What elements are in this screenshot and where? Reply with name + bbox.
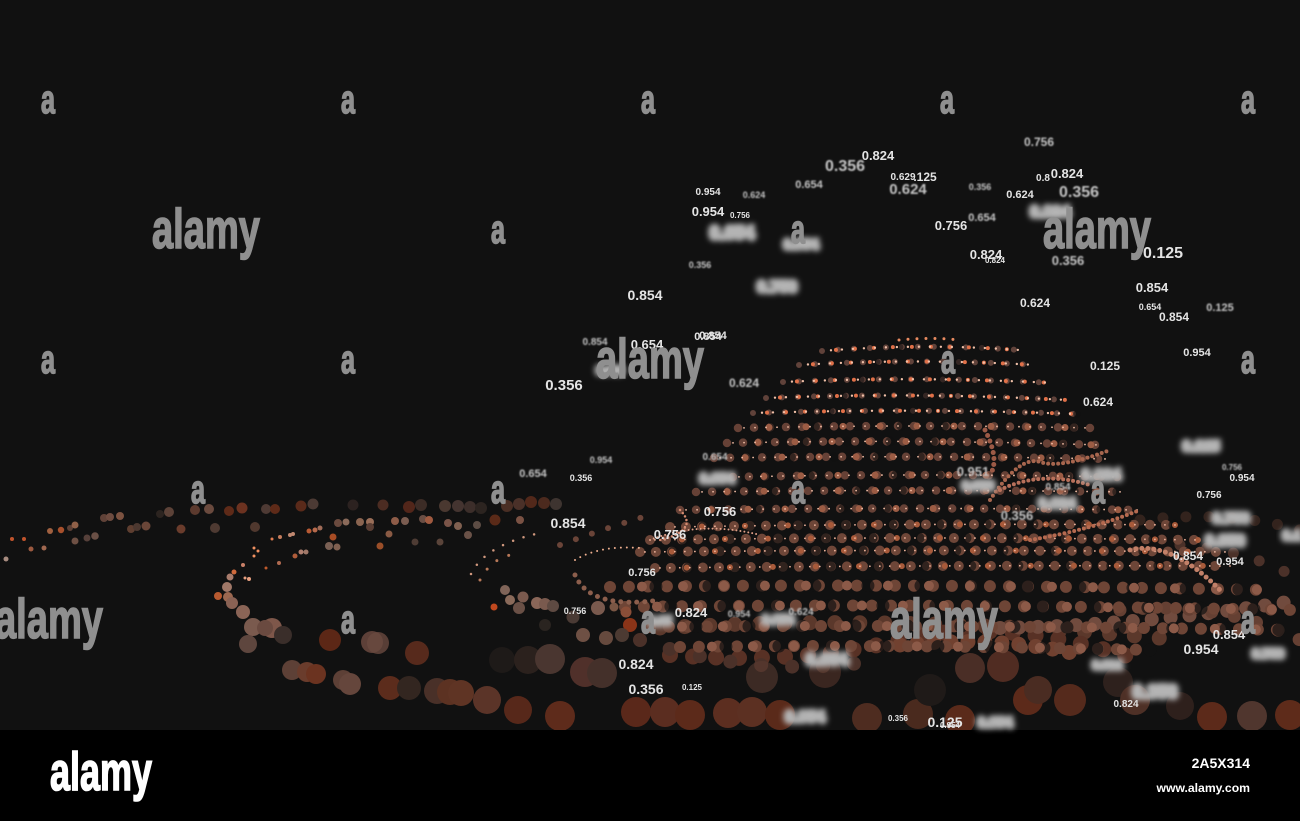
number labels: sharp: 0.824 [675,605,708,620]
number labels: soft focus: 0.756 [1222,463,1243,472]
watermark: alamy wordmarks: alamy [1043,197,1151,260]
number labels: sharp: 0.125 [682,683,703,692]
number labels: sharp: 0.624 [1083,395,1113,409]
number labels: defocused blobs [596,204,1300,730]
number labels: soft focus: 0.356 [1059,184,1099,201]
watermark: small a marks: a [41,338,55,382]
number labels: soft focus: 0.854 [582,337,608,348]
number labels: sharp: 0.954 [1183,347,1212,359]
number labels: soft focus: 0.624 [743,190,765,200]
number labels: soft focus [519,135,1243,619]
number labels: soft focus: 0.854 [1045,482,1071,493]
watermark: small a marks: a [1241,598,1255,642]
number labels: sharp: 0.756 [730,211,751,220]
number labels: soft focus: 0.654 [519,468,548,480]
number labels: defocused blobs: 0.624 [1038,495,1076,512]
number labels: sharp: 0.756 [1196,490,1222,501]
number labels: sharp: 0.824 [970,247,1003,262]
number labels: sharp: 0.756 [564,606,586,616]
number labels: soft focus: 0.356 [689,260,711,270]
watermark: alamy wordmarks [0,197,1151,650]
watermark: small a marks: a [641,78,655,122]
watermark: alamy wordmarks: alamy [152,197,260,260]
number labels: soft focus: 0.624 [788,607,814,618]
number labels: sharp: 0.624 [1006,189,1035,201]
watermark: small a marks: a [41,78,55,122]
number labels: sharp: 0.756 [935,218,967,233]
watermark: small a marks: a [791,208,805,252]
bokeh: foreground band [282,629,1300,735]
number labels: sharp: 0.954 [695,187,721,198]
number labels: defocused blobs: 0.624 [1092,658,1122,672]
number labels: sharp: 0.854 [1159,310,1189,324]
number labels: soft focus: 0.356 [1052,253,1084,268]
particle field [4,338,1300,735]
number labels: sharp: 0.824 [862,148,895,163]
number labels: soft focus: 0.954 [728,609,750,619]
number labels: defocused blobs: 0.654 [806,650,849,669]
watermark: small a marks: a [341,78,355,122]
footer bar [0,730,1300,821]
number labels: defocused blobs: 0.654 [783,236,819,252]
watermark: small a marks: a [1241,338,1255,382]
watermark: small a marks: a [491,468,505,512]
footer site url: www.alamy.com [1156,781,1250,795]
number labels: defocused blobs: 0.654 [762,612,795,627]
number labels: sharp: 0.8 [1036,173,1050,184]
number labels: sharp: 0.854 [1136,280,1169,295]
number labels: defocused blobs: 0.756 [1252,646,1284,661]
footer logo: alamy [50,742,152,802]
number labels: soft focus: 0.356 [1001,508,1033,523]
number labels: soft focus: 0.654 [968,212,997,224]
number labels: sharp: 0.624 [1020,296,1050,310]
number labels: sharp: 0.824 [618,656,654,672]
number labels: soft focus: 0.624 [729,376,759,390]
number labels: sharp: 0.854 [550,515,586,531]
number labels: soft focus: 0.125 [1206,302,1234,314]
number labels: defocused blobs: 0.654 [709,223,755,243]
watermark: small a marks: a [191,468,205,512]
number labels: sharp: 0.954 [1229,473,1255,484]
number labels: sharp: 0.824 [1113,699,1139,710]
footer image id: 2A5X314 [1192,755,1250,771]
number labels: defocused blobs: 0.756 [757,279,797,296]
watermark: small a marks [41,78,1255,642]
number labels: defocused blobs: 0.356 [1132,682,1178,702]
number labels: sharp: 0.954 [940,721,961,730]
dome rows: lower layer [610,338,1300,650]
watermark: small a marks: a [1241,78,1255,122]
number labels: sharp: 0.854 [627,287,663,303]
number labels: sharp: 0.356 [888,714,909,723]
number labels: sharp: 0.654 [631,337,664,352]
watermark: small a marks: a [341,598,355,642]
number labels: sharp: 0.854 [694,331,723,343]
number labels: soft focus: 0.654 [795,179,824,191]
watermark: alamy wordmarks: alamy [596,327,704,390]
number labels: sharp: 0.824 [1051,166,1084,181]
number labels: sharp: 0.854 [699,330,728,342]
number labels: defocused blobs: 0.954 [785,709,825,726]
number labels: sharp: 0.629 [890,172,916,183]
number labels: defocused blobs: 0.824 [1030,204,1070,221]
number labels: sharp: 0.356 [570,473,592,483]
number labels: sharp: 0.756 [628,567,656,579]
number labels: sharp: 0.125 [927,714,963,730]
number labels: soft focus: 0.356 [825,158,865,175]
number labels: defocused blobs: 0.356 [962,478,994,493]
number labels: soft focus: 0.356 [969,182,991,192]
number labels: soft focus: 0.624 [889,181,927,198]
watermark: small a marks: a [491,208,505,252]
bokeh: mid depth dots [640,517,1300,667]
number labels: sharp [545,148,1255,730]
number labels: soft focus: 0.654 [702,452,728,463]
watermark: alamy wordmarks: alamy [890,587,998,650]
number labels: sharp: 0.954 [1216,556,1245,568]
number labels: sharp: 0.356 [545,377,583,394]
left outer arc dots [4,496,562,562]
watermark: small a marks: a [941,338,955,382]
number labels: defocused blobs: 0.125 [1182,438,1220,455]
watermark: small a marks: a [641,598,655,642]
number labels: sharp: 0.824 [985,256,1006,265]
number labels: sharp: 0.654 [1139,302,1161,312]
number labels: sharp: 0.954 [1183,641,1219,657]
watermark: small a marks: a [940,78,954,122]
number labels: defocused blobs: 0.35 [648,614,672,628]
number labels: sharp: 0.854 [1173,549,1203,563]
watermark: small a marks: a [341,338,355,382]
watermark: small a marks: a [1091,468,1105,512]
number labels: soft focus: 0.954 [590,455,612,465]
number labels: sharp: 0.756 [704,504,736,519]
number labels: sharp: 0.854 [1213,627,1246,642]
left inner ring dots [214,514,524,653]
number labels: defocused blobs: 0.356 [1205,533,1245,550]
number labels: sharp: 0.125 [1143,245,1183,262]
number labels: defocused blobs: 0.854 [977,714,1013,730]
number labels: sharp: 0.756 [654,527,686,542]
number labels: sharp: 0.356 [628,681,664,697]
watermark: small a marks: a [791,468,805,512]
wavy highlight strands [650,430,1220,590]
number labels: defocused blobs: 0.654 [699,470,735,486]
number labels: sharp: 0.954 [692,204,725,219]
number labels: soft focus: 0.951 [957,464,989,479]
center ring dots [471,515,660,645]
number labels: defocused blobs: 0.356 [596,365,624,377]
number labels: sharp: .125 [913,170,937,184]
number labels: defocused blobs: 0.824 [1081,467,1121,484]
number labels: sharp: 0.125 [1090,359,1120,373]
number labels: defocused blobs: 0.756 [1212,510,1250,527]
number labels: soft focus: 0.756 [1024,135,1054,149]
